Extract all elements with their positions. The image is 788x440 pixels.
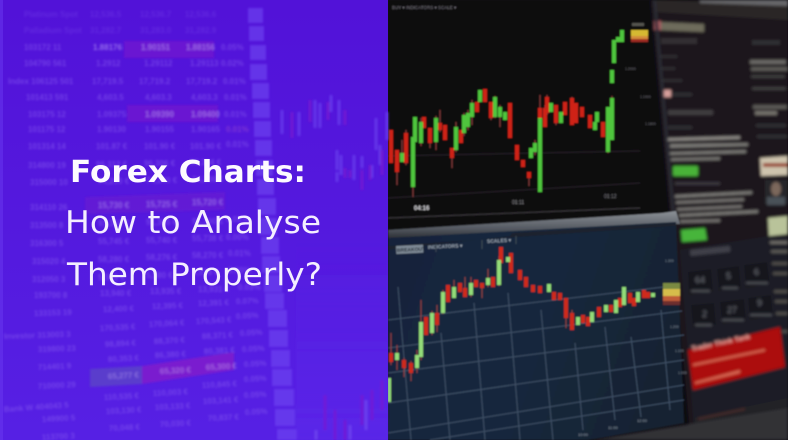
callout: red promo box [688,327,785,390]
table rows: 5,578 € [192,268,219,277]
table rows: 110,535 € [104,391,140,402]
bars: green candles [389,257,653,402]
table rows: 101314 14 [28,142,66,151]
table rows: 103,141 € [203,395,239,406]
table rows: 74,250 € [98,177,130,186]
table rows: 1.90130 [97,125,126,134]
chart: upper candlestick chart: 1.1800 [645,122,656,126]
table rows: 103175 12 [28,110,66,119]
table rows: 0.02% [226,215,249,224]
table rows: 319800 23 [38,344,76,354]
panel: toolbar: INDICATORS ▾ [428,243,463,251]
bars: green candles [402,30,622,192]
table rows: 714401 9 [38,361,72,372]
chart: lower candlestick chart: 1.100 [675,349,684,353]
table rows: 4,603.3 [191,93,218,102]
table rows: 86,380 € [155,349,187,360]
chart: lower candlestick chart: 11:00 [608,425,618,430]
icon: price marker [631,23,648,42]
chart: lower candlestick chart: 1.300 [665,259,674,263]
panel: stat tiles: 5 [726,271,731,281]
table rows: 96,306 € [144,159,176,168]
table rows: 101.90 € [190,142,222,151]
table rows: 101.87 € [96,142,128,151]
table rows: 91,310 € [98,219,130,228]
panel: toolbar [388,223,676,254]
table rows: 74,240 € [146,176,178,185]
table rows: 312050 3 [32,275,66,284]
chart: upper candlestick chart: 01:12 [604,194,617,200]
panel: stat tiles [688,262,773,328]
chart: upper candlestick chart: 1.2000 [625,67,636,71]
table rows: 1.90155 [145,125,174,134]
table rows: 103172 11 [24,43,62,52]
table rows: 4,603.3 [145,93,172,102]
bars: red candles [391,247,648,373]
table rows: 55,740 € [146,236,178,245]
table rows: 103,133 € [155,401,191,412]
table rows: 17,719.2 [186,77,218,86]
table rows: 13,931 € [198,285,230,294]
table rows: 0.01% [226,140,249,149]
table rows: 58,270 € [192,251,224,260]
table rows: 1.29113 [190,59,219,68]
table rows: 0.01% [226,125,249,134]
table rows: 58,280 € [98,255,130,264]
table rows: 0.05% [236,311,259,321]
table rows: 0.00% [226,233,249,242]
chart: lower candlestick chart: 10:00 [578,432,589,437]
table rows: 1.90165 [191,125,220,134]
table rows: 17,719.5 [92,77,124,86]
table rows: 0.05% [242,344,265,354]
table rows: 13,940 € [100,289,132,298]
table rows: 0.00% [228,266,251,275]
panel: trading screen photo [388,0,788,440]
table rows: 0.01% [224,93,247,102]
table rows: 58,276 € [146,253,178,262]
table rows: Platinum Spot [24,10,78,19]
chart: lower candlestick chart: 12:00 [637,418,648,423]
table rows: 74,236 € [192,175,224,184]
bars: red candles [391,89,603,178]
panel: stat tiles: 64 [695,275,705,285]
table rows: 0.01% [224,110,247,119]
table rows: 65,300 € [206,361,238,372]
table rows: 1.29112 [144,59,173,68]
panel: stat tiles: 2 [702,309,707,319]
table rows: 0.05% [245,407,268,417]
panel: stat tiles: 27 [727,305,737,315]
table rows: 315020 4 [32,257,66,266]
table rows: 31,282.7 [90,26,122,35]
table rows: 0.02% [221,59,244,68]
panel: purple overlay with faded data table [0,0,388,440]
panel: stat tiles: 6 [754,267,759,277]
table rows: 12,400 € [103,304,135,314]
table rows: 149900 5 [42,413,76,424]
table rows: 5,580 € [146,271,173,280]
table rows: Index 106125 501 [8,77,74,86]
table rows: 1.88176 [93,43,122,52]
title line: How to Analyse: How to Analyse [65,205,321,241]
table rows [4,10,268,440]
chart: upper candlestick chart: BUY ▾ INDICATORS ▾ SCALE ▾ [392,5,457,10]
table rows: Palladium Spot [24,26,82,35]
table rows: 104790 561 [24,59,67,68]
table rows: 110,003 € [153,387,189,398]
table rows: 65,320 € [160,365,192,376]
table rows: 12,391 € [198,298,230,308]
table rows: 0.05% [221,43,244,52]
chart: upper candlestick chart: 04:16 [414,206,430,212]
table rows: 17,719.2 [139,77,171,86]
table rows: 12,536.7 [140,10,172,19]
table rows: 88,371 € [202,330,234,341]
table rows: 31,282.9 [185,26,217,35]
panel: toolbar: BREAKOUT [397,247,425,254]
faded candles [282,95,387,182]
table rows: 103,130 € [106,405,142,416]
panel: stat tiles: 9 [757,298,762,308]
table rows: 1.90151 [141,43,170,52]
table rows: 314110 26 [30,203,68,212]
table rows: 96,304 € [190,158,222,167]
table rows: 170,535 € [100,322,136,333]
table rows: 314800 19 [28,161,66,170]
table rows: 15,725 € [146,200,178,209]
callout: red promo box: Trader Think Tank [691,334,751,353]
table: faded market data [4,8,388,440]
table rows: 70,030 € [160,418,192,429]
table rows: Investor 313003 3 [4,330,71,341]
table rows: 91,305 € [146,218,178,227]
table rows: 1.88156 [186,43,215,52]
title [65,155,322,293]
table rows: 170,064 € [149,318,185,329]
chart: lower candlestick chart [388,222,687,440]
panel: right news sidebar [590,0,788,440]
table rows: 91,300 € [192,217,224,226]
chart: upper candlestick chart: 1.1900 [640,95,651,99]
table rows: 170,543 € [196,315,232,326]
chart: upper candlestick chart [388,5,656,218]
table rows: 0.01% [228,249,251,258]
table rows: 98,894 € [105,338,137,349]
table rows: 4,603.5 [97,93,124,102]
table rows: Bank W 404043 5 [4,400,69,414]
table rows: 12,536.6 [185,10,217,19]
panel: monitor bezel [388,211,680,240]
table rows: 0.05% [244,390,267,400]
table rows: 101175 12 [28,125,66,134]
table rows: 13,935 € [150,287,182,296]
table rows: 315000 10 [30,178,68,187]
title line: Them Properly: Them Properly? [66,257,322,293]
table rows: 0.07% [236,296,259,306]
table rows: 313500 8 [30,221,64,230]
icon: price marker [663,283,680,305]
table rows: 31,283.0 [140,26,172,35]
table rows: 12,395 € [152,301,184,311]
panel: toolbar: SCALES ▾ [487,238,512,245]
table rows: 0.05% [240,328,263,338]
chart: lower candlestick chart: 1.200 [670,325,679,329]
table rows: 1.09400 [191,110,220,119]
table rows: 12,536.5 [90,10,122,19]
table rows: 55,745 € [98,237,130,246]
table rows: 0.01% [223,77,246,86]
table rows: 96,312 € [96,160,128,169]
icon: trader portrait [765,180,788,205]
table rows: 101.90 € [144,142,176,151]
highlighted rows [85,41,234,387]
chart: lower candlestick chart: 1.000 [678,371,687,375]
title line: Forex Charts: Forex Charts: [70,155,306,190]
table rows: 710000 29 [38,380,76,391]
table rows: 193700 8 [34,291,68,300]
table rows: 101413 591 [26,93,69,102]
table rows: 70,048 € [109,422,141,433]
table rows: 80,381 € [204,345,236,356]
table rows: 70,837 € [208,412,240,423]
table rows: 133153 19 [34,308,72,318]
table rows: 5,583 € [98,273,125,282]
table rows: 88,370 € [154,335,186,346]
table rows: 15,730 € [98,201,130,210]
table rows: 65,277 € [108,370,140,381]
table rows: 0.05% [244,374,267,384]
table rows: 316300 5 [30,239,64,248]
table rows: 110,845 € [202,379,238,390]
side toolbar squares [248,8,297,440]
table rows: 80,353 € [108,353,140,364]
table rows: 0.05% [244,359,267,369]
chart: upper candlestick chart: 01:11 [512,200,524,206]
table rows: 55,738 € [192,234,224,243]
table rows: 1.09390 [145,110,174,119]
table rows: 0.03% [238,283,261,292]
table rows: 15,720 € [192,198,224,207]
table rows: 1.2912 [96,59,121,68]
table rows: 1.09375 [97,110,126,119]
grid lines [388,285,684,440]
